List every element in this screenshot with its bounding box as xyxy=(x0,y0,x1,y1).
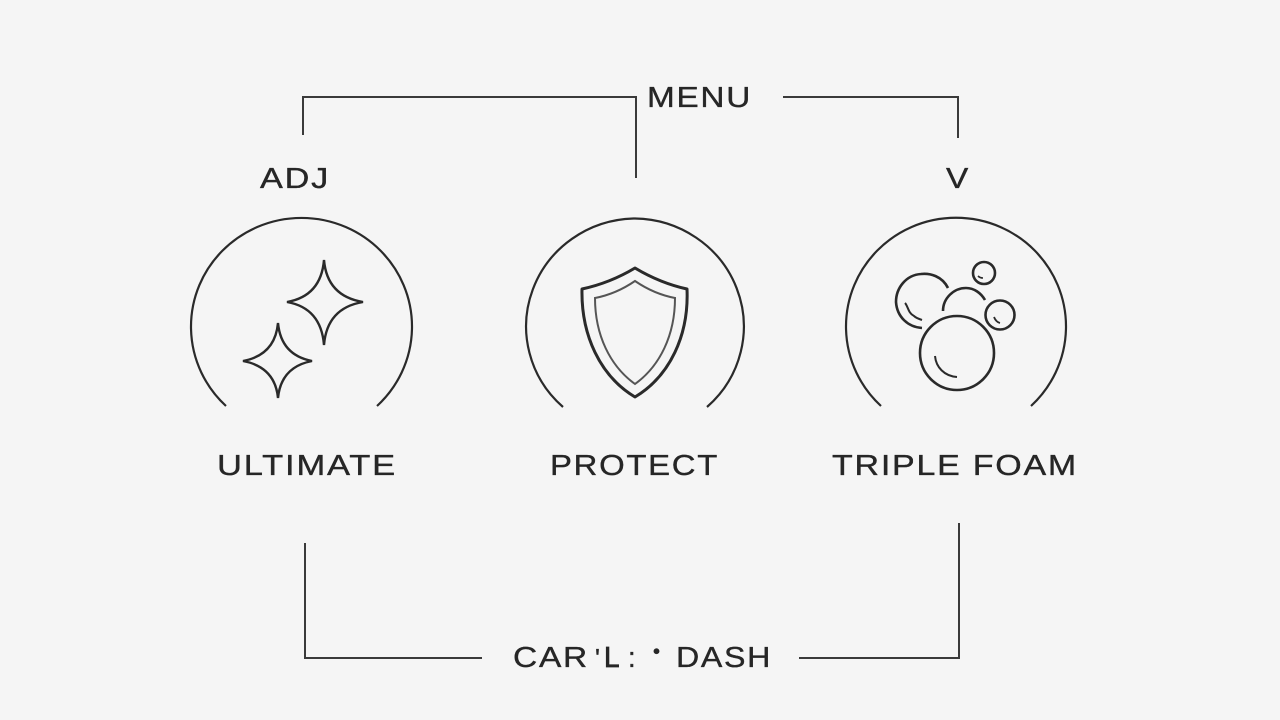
icon: foam bubbles in arc xyxy=(846,218,1066,406)
footer: CAR'L : DASH: ' xyxy=(595,643,601,673)
heading: MENU: MENU xyxy=(647,82,752,114)
top bracket connector xyxy=(303,97,958,178)
footer: CAR'L : DASH xyxy=(513,641,772,674)
footer: CAR'L : DASH: DASH xyxy=(676,642,772,674)
label: TRIPLE FOAM: TRIPLE FOAM xyxy=(832,450,1078,482)
footer: CAR'L : DASH: CAR xyxy=(513,642,589,674)
label: PROTECT: PROTECT xyxy=(550,450,719,482)
icon: shield in arc xyxy=(526,218,744,407)
footer: CAR'L : DASH: : xyxy=(628,642,637,674)
footer: CAR'L : DASH: L xyxy=(604,642,621,674)
bottom bracket connector xyxy=(305,523,959,658)
label: ADJ: ADJ xyxy=(260,163,330,195)
icon: sparkles in arc xyxy=(191,218,412,406)
label: ULTIMATE: ULTIMATE xyxy=(217,450,397,482)
footer: CAR'L : DASH: • xyxy=(653,641,662,663)
label: V: V xyxy=(946,163,970,195)
